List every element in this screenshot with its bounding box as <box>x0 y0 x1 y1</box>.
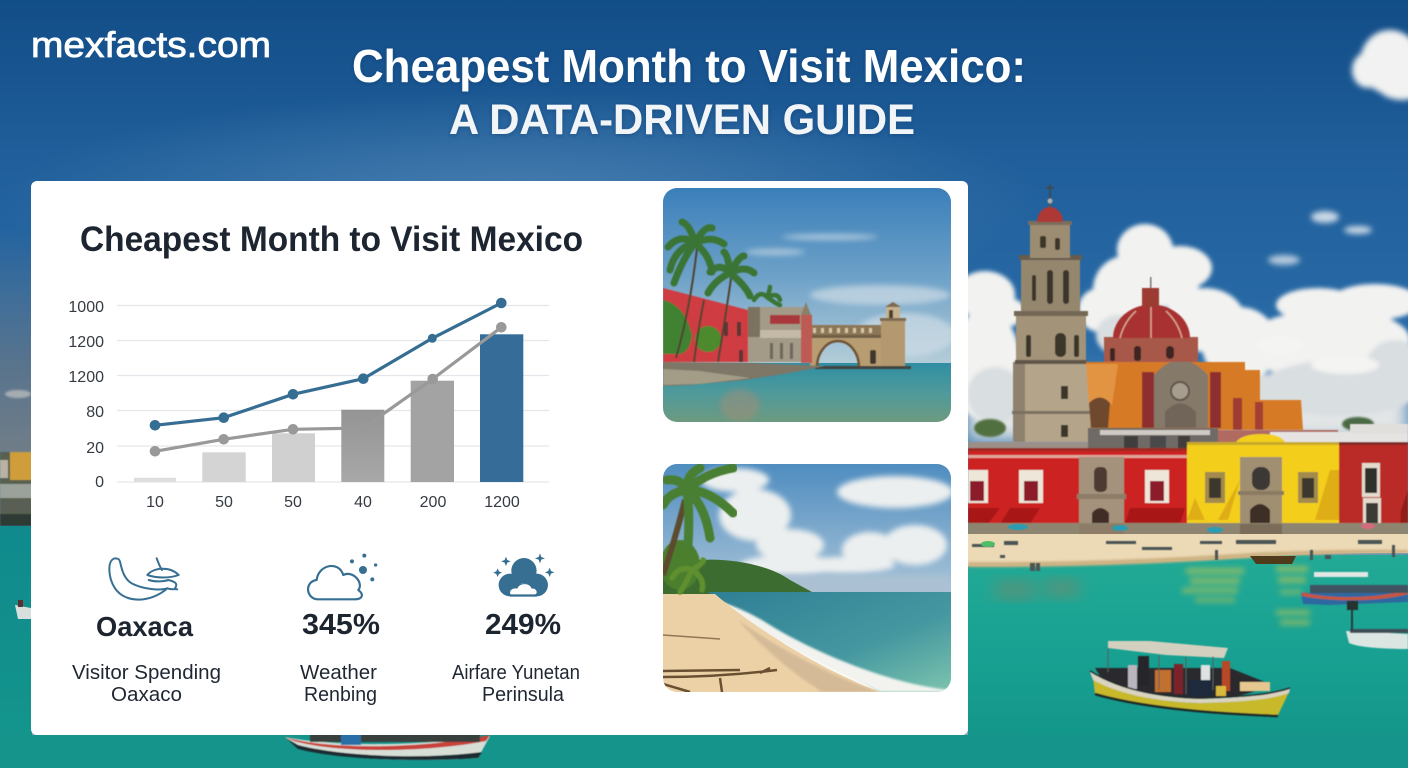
sky haze <box>968 375 1408 440</box>
palms <box>660 468 733 592</box>
boat: blue boat <box>1301 572 1408 605</box>
x axis labels: 1200 <box>484 494 520 511</box>
label: visitor spending: Oaxaco <box>111 684 182 706</box>
icon: sun behind clouds with sparkles <box>493 553 554 597</box>
photo: colonial waterfront with arched bridge <box>663 188 955 422</box>
x axis labels: 200 <box>420 494 446 511</box>
label: airfare <box>452 662 580 706</box>
chart heading: Cheapest Month to Visit Mexico <box>80 219 583 259</box>
background church: tower <box>1012 184 1303 442</box>
y axis labels: 1200 <box>68 369 104 386</box>
line: grey series <box>150 322 507 457</box>
driftwood <box>663 635 777 692</box>
label: weather: Renbing <box>304 684 377 706</box>
y axis labels: 0 <box>95 474 104 491</box>
sand <box>663 594 880 692</box>
label: visitor spending: Visitor Spending <box>72 662 221 684</box>
stat: 249%: 249% <box>485 609 561 641</box>
y axis labels: 80 <box>86 404 104 421</box>
site name: mexfacts.com <box>31 24 271 65</box>
x axis labels: 40 <box>354 494 372 511</box>
foam <box>713 600 951 692</box>
boat: yellow canopy boat <box>1090 641 1290 716</box>
left town <box>0 452 32 526</box>
boat: foreground red boat <box>285 734 490 760</box>
boat: white boat <box>1346 601 1408 649</box>
chart: combined bars and lines <box>68 298 549 511</box>
sea <box>708 592 951 692</box>
x axis labels: 10 <box>146 494 164 511</box>
x axis labels <box>146 494 520 511</box>
trees <box>663 300 692 354</box>
boat: beached boat <box>1250 556 1296 564</box>
panel: main card <box>31 181 968 735</box>
palm fronds <box>668 222 780 305</box>
stat: Oaxaca: Oaxaca <box>96 611 194 642</box>
buildings <box>663 288 748 362</box>
label: weather <box>300 662 377 706</box>
background church: nave and dome <box>1086 362 1303 430</box>
title <box>352 40 1026 144</box>
bars <box>134 334 523 482</box>
arched bridge <box>809 337 882 367</box>
icon: chili and hat <box>109 558 179 600</box>
x axis labels: 50 <box>284 494 302 511</box>
background: rooftops, coloured buildings <box>968 424 1408 535</box>
label: visitor spending <box>72 662 221 706</box>
title: A DATA-DRIVEN GUIDE <box>449 96 915 144</box>
rocks <box>663 362 825 386</box>
icon: cloud with dots <box>308 554 377 599</box>
palm trunks <box>676 248 732 362</box>
yellow building <box>1187 434 1339 524</box>
y axis labels: 1200 <box>68 334 104 351</box>
photo: tropical beach with palm <box>660 464 953 692</box>
label: weather: Weather <box>300 662 377 684</box>
x axis labels: 50 <box>215 494 233 511</box>
y axis labels: 20 <box>86 440 104 457</box>
hill <box>663 560 812 594</box>
sea <box>968 555 1408 768</box>
y axis labels: 1000 <box>68 299 104 316</box>
red building <box>968 448 1188 524</box>
stat: 345%: 345% <box>302 609 380 641</box>
label: airfare: Airfare Yunetan <box>452 662 580 684</box>
line: blue series <box>150 298 507 431</box>
right red building <box>1339 442 1408 524</box>
plinth <box>968 523 1408 535</box>
title: Cheapest Month to Visit Mexico: <box>352 40 1026 92</box>
label: airfare: Perinsula <box>482 684 565 706</box>
y axis labels <box>68 299 104 491</box>
background: beach <box>968 523 1408 571</box>
bridge tower <box>881 320 905 368</box>
